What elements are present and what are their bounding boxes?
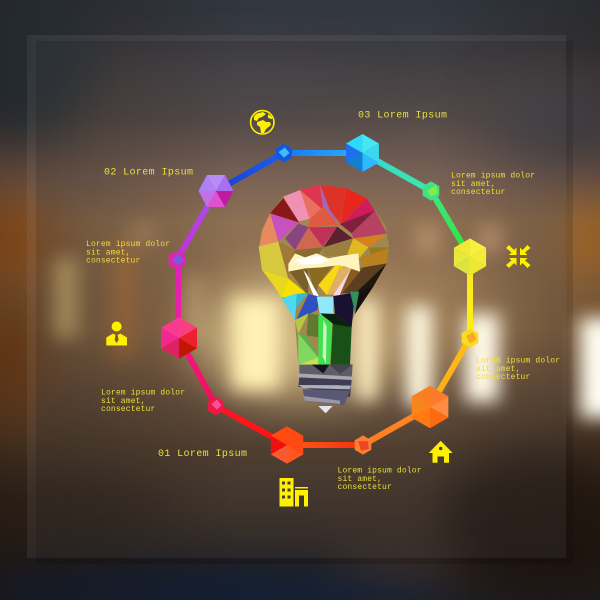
text block: lower left: consectetur (101, 405, 156, 414)
screw base (296, 365, 354, 413)
hexagon: pink (161, 317, 197, 359)
ring connectors (177, 153, 470, 445)
node: blue (276, 144, 292, 162)
text block: lower right: consectetur (476, 373, 531, 382)
node: amber (462, 328, 478, 348)
text block: upper left: Lorem ipsum dolor (86, 240, 170, 249)
node: pink-red (208, 397, 224, 415)
text block: lower right: Lorem ipsum dolor (476, 356, 560, 366)
lightbulb (259, 184, 389, 413)
icon: house (429, 441, 453, 463)
bulb glass facets: middle (259, 238, 389, 298)
filament (288, 253, 360, 298)
icon: person (106, 322, 127, 346)
text block: upper right: consectetur (451, 188, 506, 197)
heading: 02: 02 Lorem Ipsum (104, 168, 193, 178)
text block: bottom: consectetur (338, 483, 392, 492)
icon: buildings (280, 478, 308, 506)
heading: 01: 01 Lorem Ipsum (158, 449, 247, 460)
node: orange-red (355, 435, 371, 455)
icon: converging arrows (506, 245, 530, 268)
icon: globe (251, 111, 274, 134)
heading: 03: 03 Lorem Ipsum (358, 110, 447, 122)
hexagon: orange (412, 386, 448, 428)
text block: bottom: sit amet, (338, 475, 382, 484)
text block: upper left: consectetur (86, 257, 141, 266)
text block: upper left: sit amet, (86, 248, 131, 257)
node: green (423, 181, 439, 201)
bulb neck facets (282, 287, 373, 365)
hexagon: red (271, 426, 303, 464)
hexagon: cyan (346, 134, 379, 172)
glass frame: light panel (27, 35, 566, 558)
bulb silhouette (259, 184, 389, 365)
text block: upper right: sit amet, (451, 180, 496, 189)
text block: bottom: Lorem ipsum dolor (338, 466, 422, 476)
glass frame: dark panel (36, 41, 573, 564)
node: violet (169, 250, 185, 270)
hexagon: yellow (454, 238, 486, 276)
hexagon: purple (198, 175, 234, 207)
bulb glass facets: top (259, 184, 387, 250)
text block: upper right: Lorem ipsum dolor (451, 172, 535, 180)
blurred light columns (54, 222, 600, 418)
text block: lower left: Lorem ipsum dolor (101, 388, 185, 398)
text block: lower right: sit amet, (476, 365, 521, 374)
text block: lower left: sit amet, (101, 397, 146, 406)
